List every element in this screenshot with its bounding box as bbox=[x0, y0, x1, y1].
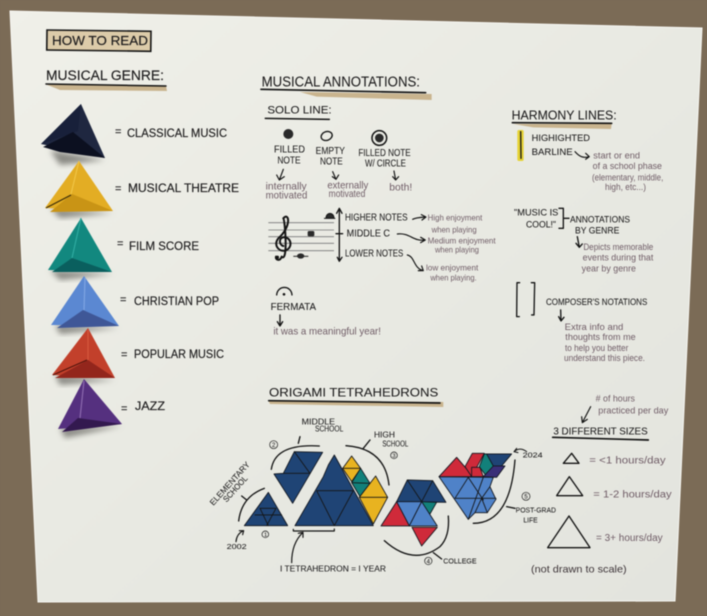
college tetrahedrons: 4 bbox=[427, 559, 431, 565]
highlighted barline key bbox=[517, 130, 663, 192]
legend: film score teal origami: = bbox=[117, 238, 123, 250]
high school tetrahedrons: HIGH bbox=[374, 430, 395, 439]
legend: classical music navy origami bbox=[41, 104, 227, 165]
highlighted barline key: high, etc...) bbox=[605, 182, 646, 192]
heading: harmony lines bbox=[512, 108, 617, 129]
filled note key bbox=[266, 129, 307, 201]
filled note key: FILLED bbox=[274, 144, 305, 155]
heading: origami tetrahedrons bbox=[268, 386, 443, 407]
legend: musical theatre yellow origami: = bbox=[115, 183, 121, 195]
note: hours practiced per day bbox=[582, 394, 669, 423]
post-grad life tetrahedrons bbox=[439, 453, 515, 523]
middle school tetrahedrons: 2 bbox=[272, 443, 276, 449]
annotations by genre key: events during that bbox=[583, 253, 654, 263]
elementary school tetrahedrons bbox=[207, 459, 288, 551]
panel: musical annotations and solo line bbox=[261, 75, 496, 338]
title: how to read: HOW TO READ bbox=[52, 33, 148, 48]
annotations by genre key: "MUSIC IS bbox=[514, 208, 558, 218]
elementary school tetrahedrons: 1 bbox=[264, 533, 267, 539]
subheading: solo line: SOLO LINE: bbox=[267, 104, 332, 116]
high school tetrahedrons: SCHOOL bbox=[382, 440, 409, 449]
panel: origami tetrahedrons timeline bbox=[207, 386, 515, 574]
heading: musical annotations bbox=[261, 75, 432, 100]
title: how to read bbox=[47, 30, 151, 51]
highlighted barline key: start or end bbox=[593, 150, 640, 160]
empty note key: motivated bbox=[329, 189, 365, 200]
filled note with circle key: W/ CIRCLE bbox=[365, 159, 406, 170]
middle school tetrahedrons bbox=[270, 417, 344, 503]
fermata key: FERMATA bbox=[271, 302, 317, 313]
pitch labels and enjoyment notes: LOWER NOTES bbox=[345, 249, 403, 260]
annotations by genre key: Depicts memorable bbox=[583, 242, 653, 252]
note: not drawn to scale: (not drawn to scale) bbox=[531, 565, 627, 576]
pitch labels and enjoyment notes: HIGHER NOTES bbox=[345, 213, 408, 224]
pitch labels and enjoyment notes: when playing. bbox=[429, 272, 477, 282]
legend: christian pop blue origami: = bbox=[120, 294, 126, 306]
filled note with circle key: both! bbox=[389, 183, 412, 194]
legend: popular music red origami bbox=[52, 328, 224, 385]
composer's notations key bbox=[517, 283, 647, 363]
annotations by genre key: BY GENRE bbox=[575, 225, 619, 235]
heading: musical genre: MUSICAL GENRE: bbox=[46, 68, 164, 83]
composer's notations key: thoughts from me bbox=[565, 332, 636, 342]
pitch labels and enjoyment notes: low enjoyment bbox=[426, 263, 479, 273]
size key: under 1 hour: = <1 hours/day bbox=[589, 455, 666, 466]
legend: christian pop blue origami bbox=[51, 276, 219, 334]
filled note key: internally bbox=[266, 181, 307, 192]
legend: popular music red origami: POPULAR MUSIC bbox=[134, 349, 224, 361]
highlighted barline key: HIGHIGHTED bbox=[532, 133, 590, 143]
empty note key: NOTE bbox=[320, 157, 343, 168]
one tetrahedron equals one year callout bbox=[280, 529, 386, 574]
composer's notations key: understand this piece. bbox=[564, 353, 645, 363]
size key: 1 to 2 hours: = 1-2 hours/day bbox=[593, 489, 672, 500]
empty note key bbox=[316, 130, 368, 200]
highlighted barline key: BARLINE bbox=[532, 147, 573, 157]
middle school tetrahedrons: SCHOOL bbox=[315, 425, 344, 434]
post-grad life and 2024 labels bbox=[514, 448, 556, 525]
panel: musical genre legend bbox=[41, 68, 239, 438]
legend: jazz purple origami: = bbox=[121, 403, 127, 415]
middle school tetrahedrons: MIDDLE bbox=[302, 417, 335, 426]
legend: jazz purple origami: JAZZ bbox=[135, 401, 165, 413]
post-grad life and 2024 labels: LIFE bbox=[523, 516, 538, 525]
college tetrahedrons: COLLEGE bbox=[443, 556, 477, 565]
pitch labels and enjoyment notes: when playing bbox=[434, 244, 479, 254]
size key: 3 plus hours: = 3+ hours/day bbox=[596, 533, 663, 544]
note: hours practiced per day: # of hours bbox=[596, 394, 635, 404]
size key: 3 plus hours bbox=[548, 516, 663, 548]
heading: harmony lines: HARMONY LINES: bbox=[512, 108, 617, 122]
legend: musical theatre yellow origami bbox=[45, 161, 239, 218]
staff with treble clef and notes bbox=[268, 213, 335, 260]
composer's notations key: Extra info and bbox=[565, 322, 623, 332]
legend: classical music navy origami: CLASSICAL MUSIC bbox=[127, 128, 227, 140]
post-grad life and 2024 labels: 2024 bbox=[523, 450, 544, 459]
annotations by genre key: COOL!" bbox=[526, 219, 556, 229]
elementary school tetrahedrons: 2002 bbox=[227, 542, 247, 551]
composer's notations key: to help you better bbox=[565, 343, 628, 353]
size key: 1 to 2 hours bbox=[557, 477, 672, 500]
heading: origami tetrahedrons: ORIGAMI TETRAHEDRONS bbox=[269, 386, 438, 400]
composer's notations key: COMPOSER'S NOTATIONS bbox=[546, 297, 647, 307]
fermata key bbox=[271, 287, 381, 338]
heading: musical genre bbox=[45, 68, 167, 91]
legend: film score teal origami bbox=[48, 218, 199, 280]
legend: classical music navy origami: = bbox=[115, 126, 121, 138]
pitch labels and enjoyment notes bbox=[345, 213, 496, 282]
elementary school tetrahedrons: SCHOOL bbox=[221, 473, 250, 504]
pitch labels and enjoyment notes: when playing bbox=[431, 224, 477, 234]
panel: harmony lines bbox=[512, 108, 663, 363]
legend: popular music red origami: = bbox=[121, 349, 127, 361]
post-grad life and 2024 labels: 5 bbox=[524, 495, 528, 501]
fermata key: it was a meaningful year! bbox=[273, 327, 381, 338]
elementary school tetrahedrons: ELEMENTARY bbox=[207, 459, 252, 507]
pitch labels and enjoyment notes: MIDDLE C bbox=[347, 229, 390, 240]
filled note with circle key bbox=[358, 131, 412, 194]
filled note key: motivated bbox=[266, 190, 307, 201]
pitch range arrow bbox=[336, 208, 343, 261]
high school tetrahedrons: 3 bbox=[392, 454, 395, 460]
pitch labels and enjoyment notes: High enjoyment bbox=[428, 213, 483, 223]
panel: three different sizes bbox=[514, 394, 672, 576]
annotations by genre key: year by genre bbox=[582, 264, 636, 274]
legend: film score teal origami: FILM SCORE bbox=[129, 241, 199, 253]
empty note key: externally bbox=[327, 181, 368, 192]
highlighted barline key: (elementary, middle, bbox=[592, 173, 663, 183]
post-grad life and 2024 labels: POST-GRAD bbox=[516, 505, 556, 514]
heading: musical annotations: MUSICAL ANNOTATIONS: bbox=[262, 75, 420, 91]
legend: jazz purple origami bbox=[58, 379, 165, 438]
filled note key: NOTE bbox=[277, 155, 301, 166]
filled note with circle key: FILLED NOTE bbox=[358, 148, 411, 159]
pitch labels and enjoyment notes: Medium enjoyment bbox=[428, 235, 496, 245]
note: hours practiced per day: practiced per day bbox=[598, 405, 669, 415]
high school tetrahedrons bbox=[295, 430, 409, 526]
annotations by genre key: ANNOTATIONS bbox=[570, 215, 630, 225]
legend: christian pop blue origami: CHRISTIAN POP bbox=[134, 296, 219, 308]
one tetrahedron equals one year callout: I TETRAHEDRON = I YEAR bbox=[280, 565, 386, 574]
annotations by genre key bbox=[514, 208, 654, 274]
highlighted barline key: of a school phase bbox=[593, 161, 662, 171]
legend: musical theatre yellow origami: MUSICAL THEATRE bbox=[128, 183, 239, 195]
size key: under 1 hour bbox=[563, 453, 666, 466]
college tetrahedrons bbox=[381, 480, 477, 565]
empty note key: EMPTY bbox=[316, 146, 345, 157]
heading: 3 different sizes: 3 DIFFERENT SIZES bbox=[553, 426, 648, 437]
